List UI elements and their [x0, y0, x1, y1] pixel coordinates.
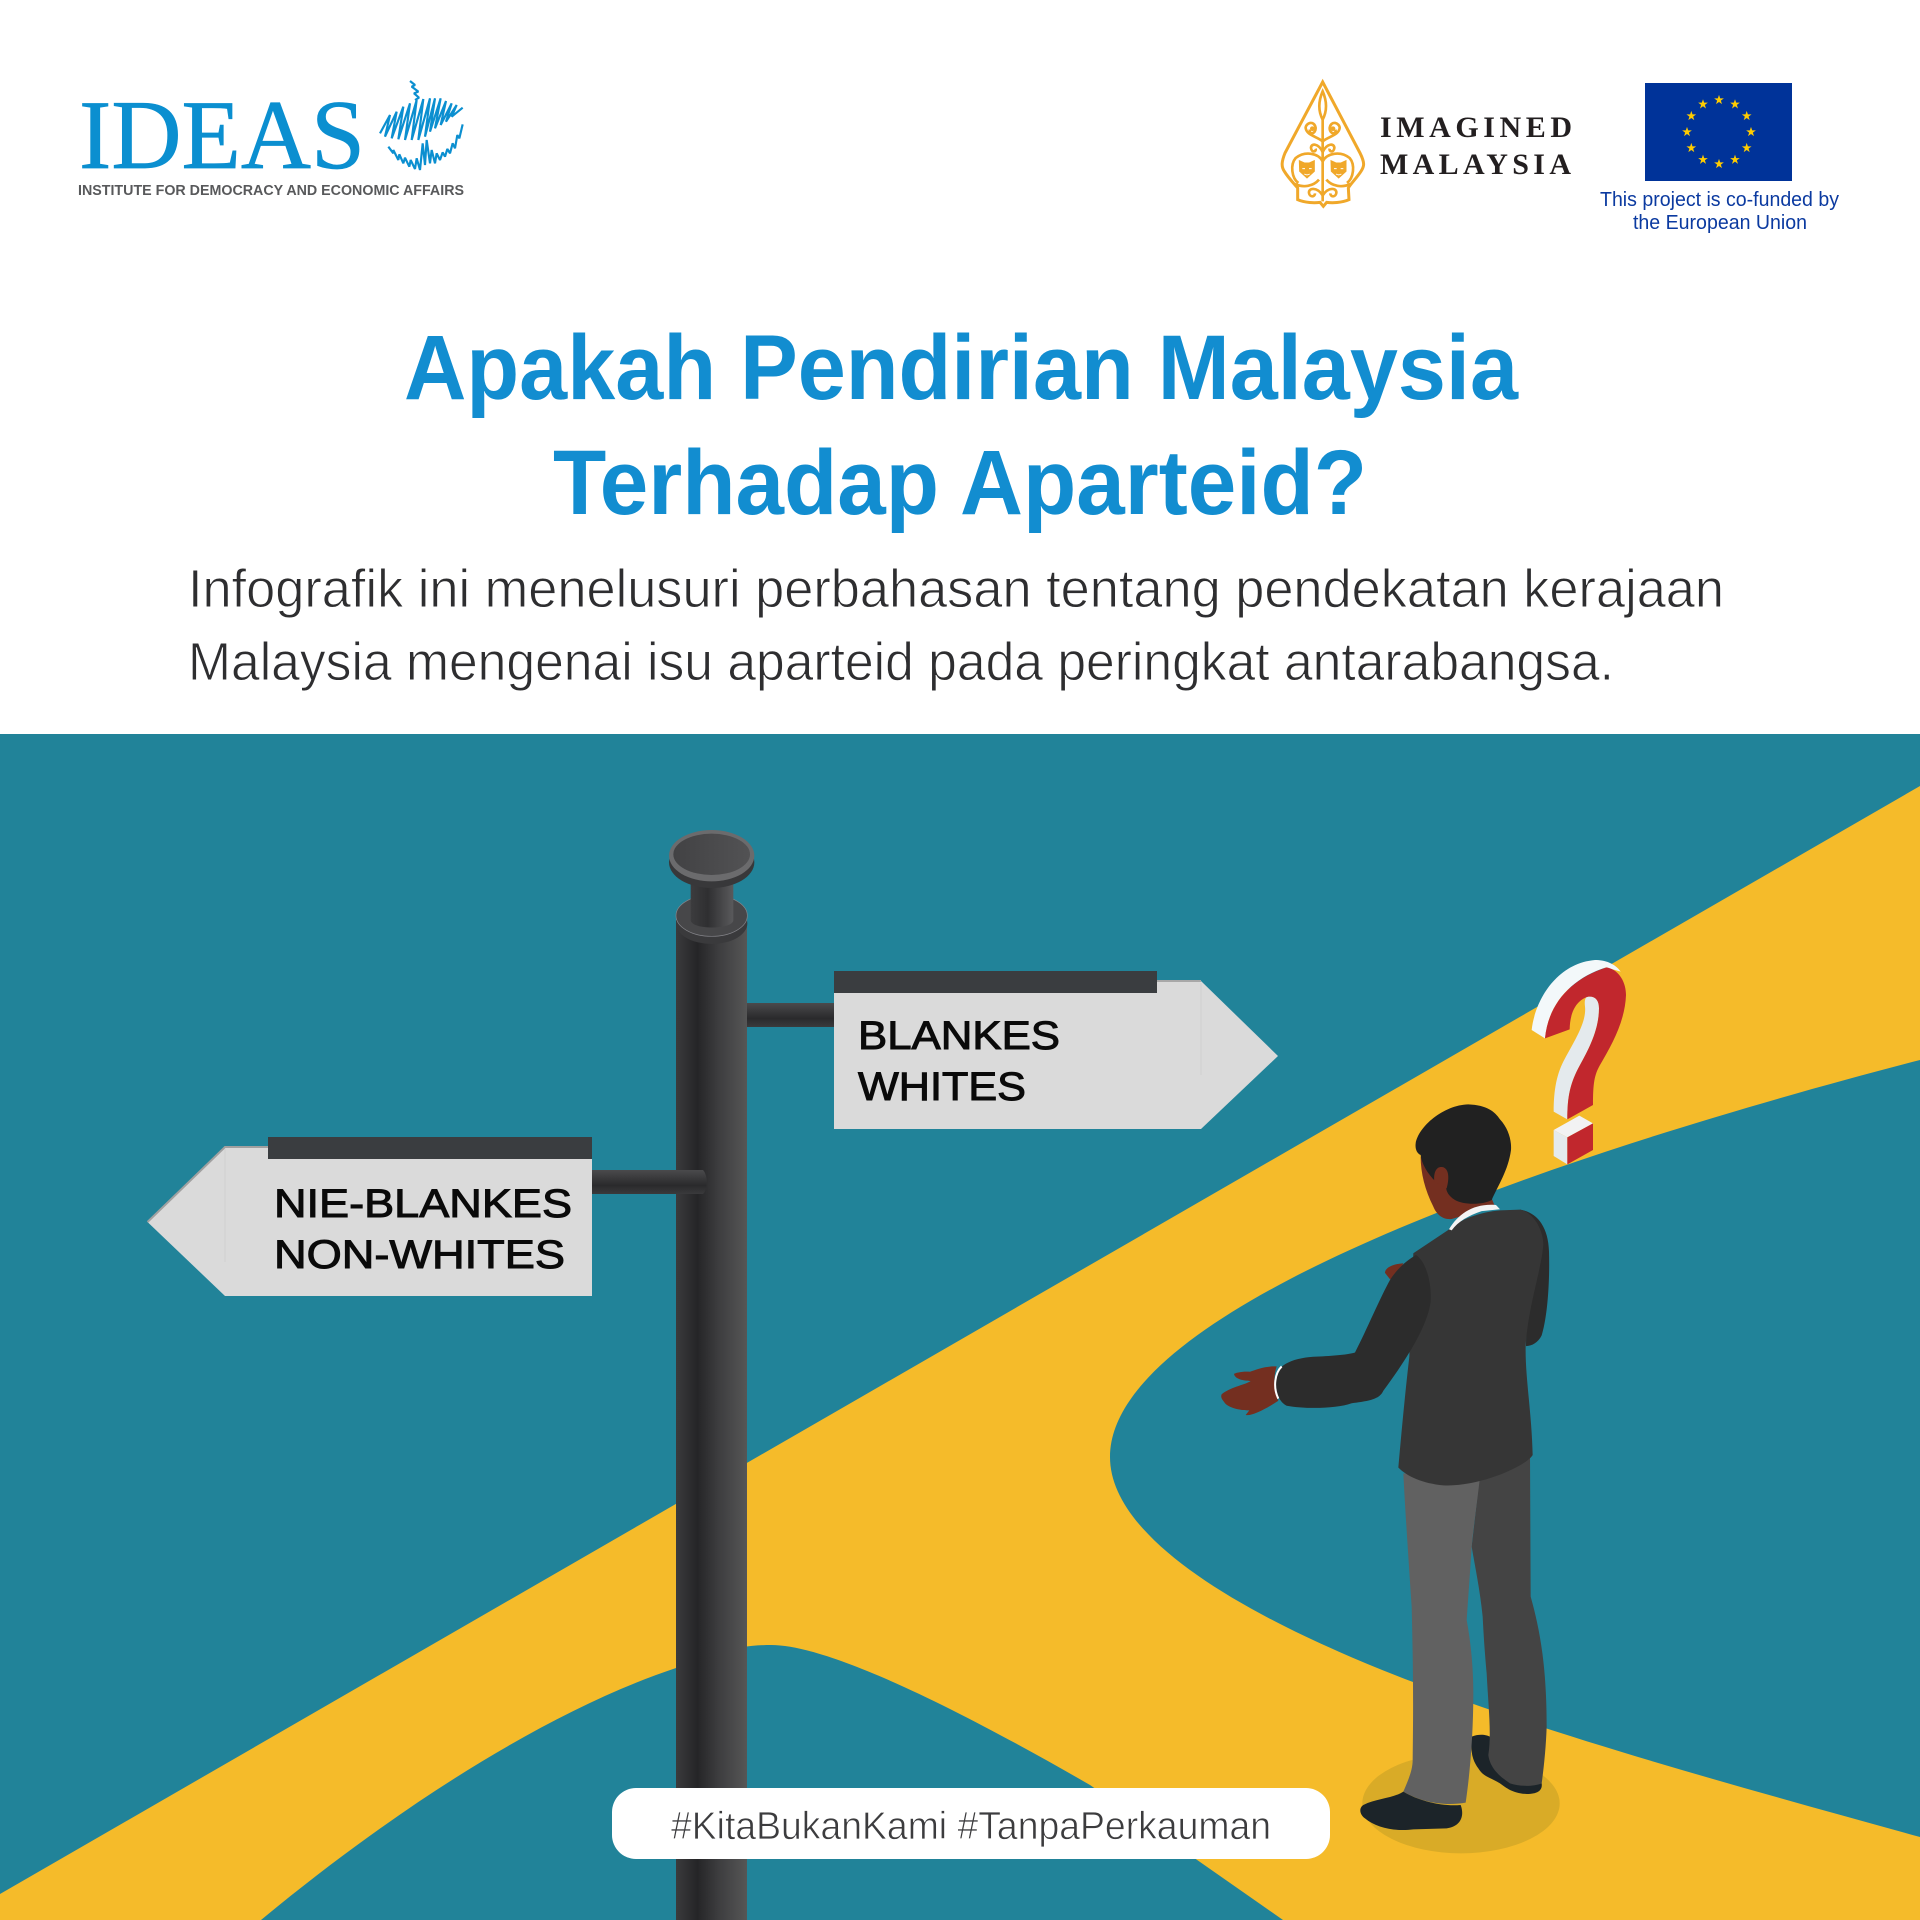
logo: IDEAS	[78, 81, 464, 199]
sign: non-whites: NIE-BLANKES	[274, 1182, 572, 1226]
pole	[676, 920, 747, 1920]
subtitle: Infografik ini menelusuri perbahasan tentang pendekatan kerajaan	[188, 559, 1724, 619]
sign: whites: WHITES	[858, 1065, 1026, 1109]
hashtag tag: #KitaBukanKami #TanpaPerkauman	[671, 1805, 1271, 1848]
right arm	[745, 1003, 835, 1027]
illustration panel: teal background	[0, 734, 1920, 1920]
sign: whites: BLANKES	[858, 1014, 1060, 1058]
co-funding text	[1600, 189, 1839, 234]
person: legs and shoes	[1360, 1455, 1560, 1853]
teal hill in road	[261, 1645, 1283, 1920]
hashtag tag	[612, 1788, 1330, 1859]
signpost	[148, 830, 1278, 1920]
icon: question mark	[1532, 960, 1626, 1164]
subtitle: Malaysia mengenai isu aparteid pada peringkat antarabangsa.	[188, 632, 1614, 692]
IDEAS wordmark: IDEAS	[79, 81, 365, 190]
yellow forked road	[0, 786, 1920, 1920]
person: jacket and arms	[1221, 1205, 1549, 1485]
person	[1221, 1104, 1560, 1853]
co-funding text: the European Union	[1633, 212, 1807, 234]
person: head and neck	[1416, 1104, 1511, 1219]
icon: scribbled dove	[380, 81, 463, 170]
title: Apakah Pendirian Malaysia	[404, 317, 1519, 419]
IDEAS full name: INSTITUTE FOR DEMOCRACY AND ECONOMIC AFFAIRS	[78, 183, 464, 199]
Imagined Malaysia wordmark	[1380, 111, 1572, 181]
sign: whites	[834, 971, 1278, 1129]
subtitle	[188, 559, 1724, 692]
title	[404, 317, 1519, 534]
Imagined Malaysia wordmark: MALAYSIA	[1380, 148, 1571, 181]
icon: golden wayang leaf	[1282, 82, 1364, 206]
logo: EU flag and co-funding note	[1600, 83, 1839, 234]
sign: non-whites: NON-WHITES	[274, 1233, 565, 1277]
pole collar and cap	[669, 830, 754, 944]
left arm	[590, 1170, 707, 1194]
EU flag	[1645, 83, 1792, 181]
title: Terhadap Aparteid?	[553, 432, 1367, 534]
sign: non-whites	[148, 1137, 592, 1296]
logo: Imagined Malaysia	[1282, 82, 1572, 206]
co-funding text: This project is co-funded by	[1600, 189, 1839, 211]
Imagined Malaysia wordmark: IMAGINED	[1380, 111, 1572, 144]
